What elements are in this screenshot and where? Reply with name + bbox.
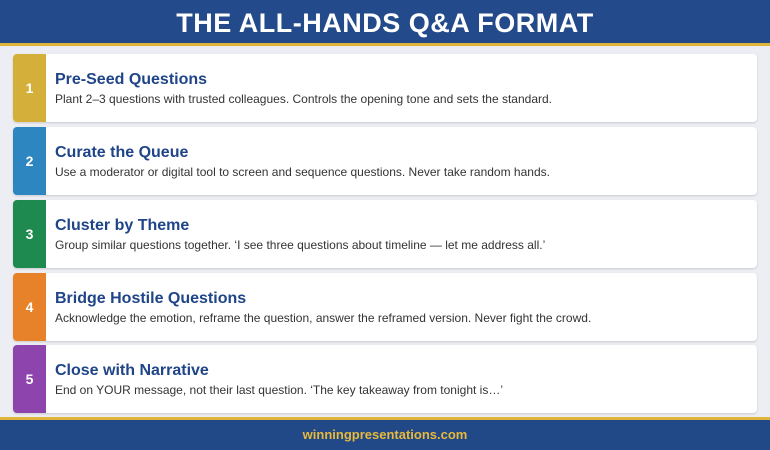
panel: step 4: 4 [26, 299, 33, 315]
panel: step 3: Cluster by Theme [55, 217, 189, 234]
panel: step 5: End on YOUR message, not their last question. ‘The key takeaway from tonight is…’ [55, 383, 503, 397]
panel: step 5: Close with Narrative [55, 362, 209, 379]
panel: step 4: Acknowledge the emotion, reframe the question, answer the reframed version. Never fight the crowd. [55, 311, 591, 325]
panel: step 5 [13, 345, 757, 413]
panel: step 3: 3 [26, 226, 33, 242]
title [0, 0, 770, 46]
panel: step 4: Bridge Hostile Questions [55, 290, 246, 307]
footer: winningpresentations.com [303, 427, 467, 442]
panel: step 2: 2 [26, 153, 33, 169]
panel: step 2: Use a moderator or digital tool to screen and sequence questions. Never take random hands. [55, 165, 550, 179]
panel: step 2 [13, 127, 757, 195]
panel: step 4 [13, 273, 757, 341]
panel: step 5: 5 [26, 371, 33, 387]
title: THE ALL-HANDS Q&A FORMAT [176, 8, 594, 38]
footer [0, 417, 770, 450]
panel: step 2: Curate the Queue [55, 144, 188, 161]
panel: step 1: 1 [26, 80, 33, 96]
panel: step 1: Plant 2–3 questions with trusted colleagues. Controls the opening tone and sets the standard. [55, 92, 552, 106]
panel: step 3 [13, 200, 757, 268]
panel: step 3: Group similar questions together. ‘I see three questions about timeline — let me address all.’ [55, 238, 545, 252]
panel: step 1 [13, 54, 757, 122]
panel: step 1: Pre-Seed Questions [55, 71, 207, 88]
